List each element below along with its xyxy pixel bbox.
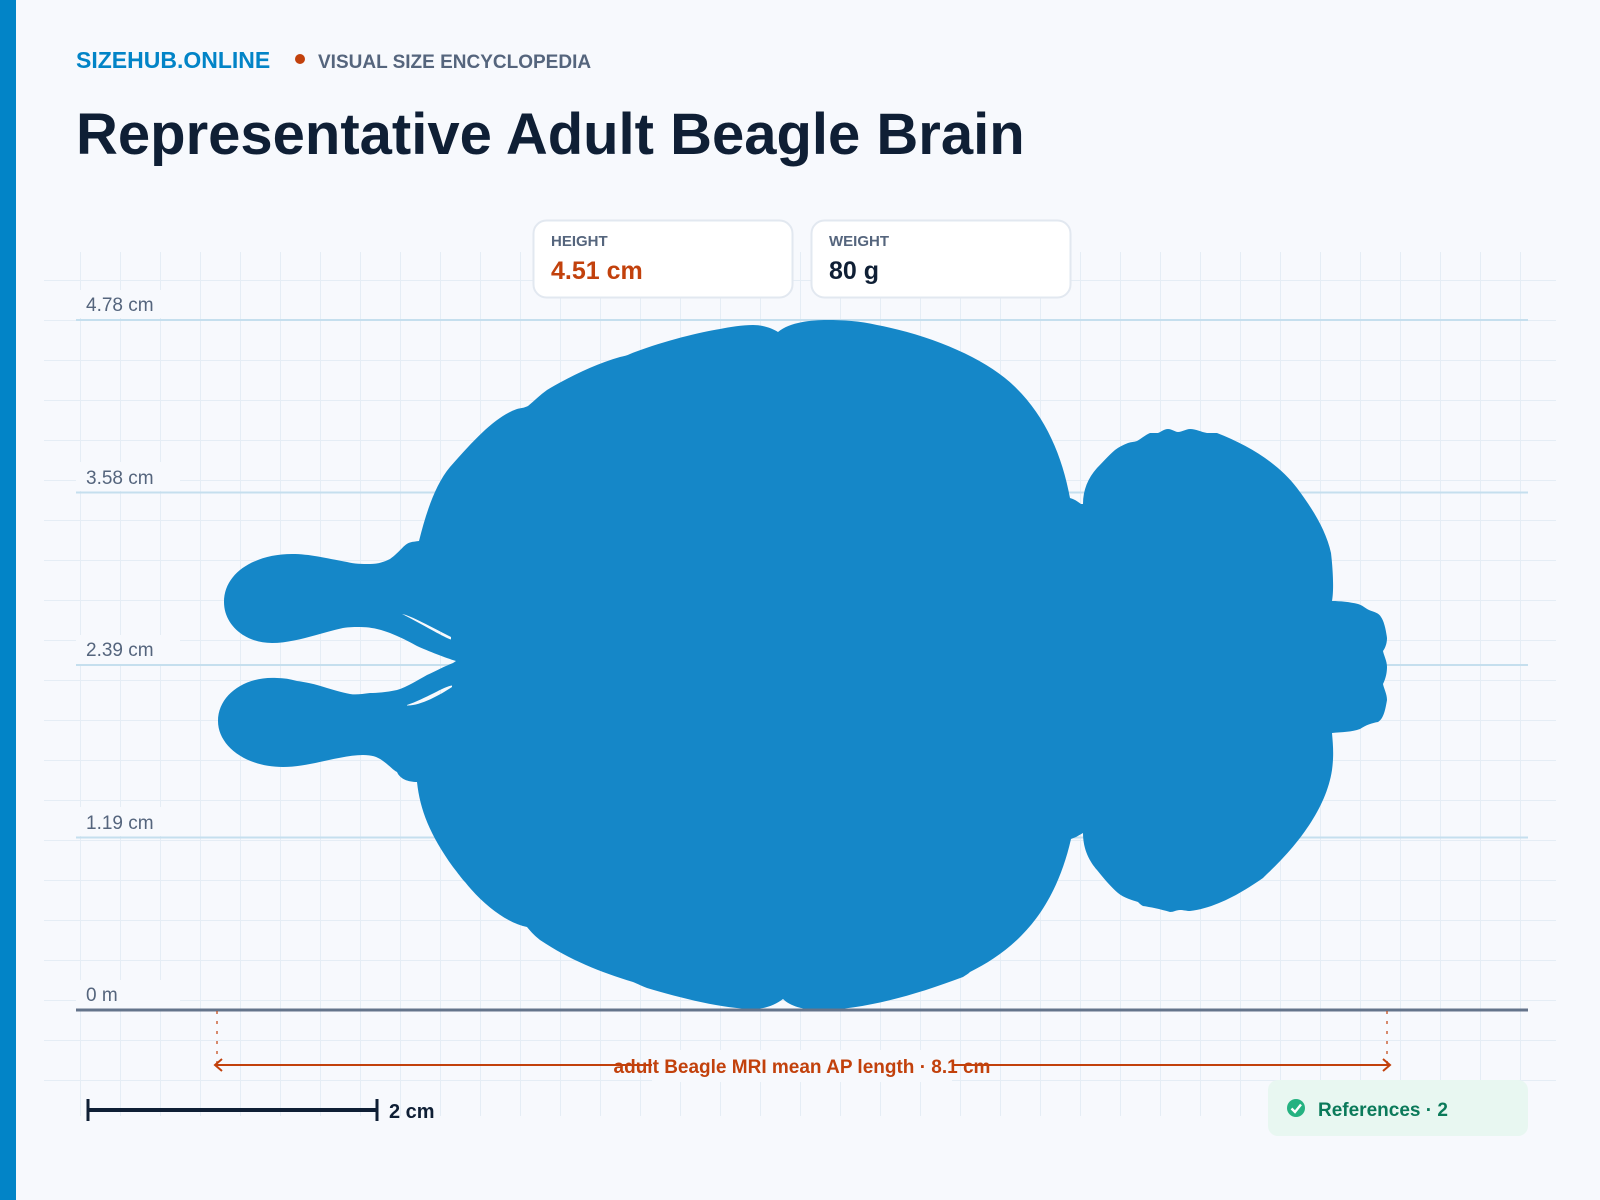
scale bar label: 2 cm (389, 1101, 435, 1123)
references text: References · 2 (1318, 1100, 1448, 1121)
card: weight (812, 220, 1070, 298)
label: 3.58 cm: 3.58 cm (86, 468, 154, 489)
ground line (76, 1008, 1528, 1012)
left accent bar (0, 0, 16, 1200)
label: 0 m: 0 m (86, 985, 118, 1006)
left dotted guide (216, 1011, 218, 1065)
separator dot (295, 54, 305, 64)
tagline: VISUAL SIZE ENCYCLOPEDIA (318, 52, 591, 73)
label: 2.39 cm: 2.39 cm (86, 640, 154, 661)
card: height (534, 220, 792, 298)
brain silhouette (218, 320, 1387, 1010)
scale bar (88, 1099, 435, 1123)
card label: WEIGHT (829, 233, 889, 250)
card value: 4.51 cm (551, 257, 643, 285)
references chip (1268, 1080, 1528, 1136)
brand header (76, 47, 591, 73)
right dotted guide (1386, 1011, 1388, 1065)
length arrow (215, 1059, 1390, 1071)
length caption: adult Beagle MRI mean AP length · 8.1 cm (614, 1057, 990, 1078)
card label: HEIGHT (551, 233, 608, 250)
height scale labels (76, 290, 180, 1009)
brand name: SIZEHUB.ONLINE (76, 47, 270, 73)
title: Representative Adult Beagle Brain (76, 102, 1025, 167)
icon: check (1287, 1099, 1305, 1117)
card value: 80 g (829, 257, 879, 285)
label: 4.78 cm: 4.78 cm (86, 295, 154, 316)
label: 1.19 cm: 1.19 cm (86, 813, 154, 834)
length dimension (215, 1011, 1390, 1082)
